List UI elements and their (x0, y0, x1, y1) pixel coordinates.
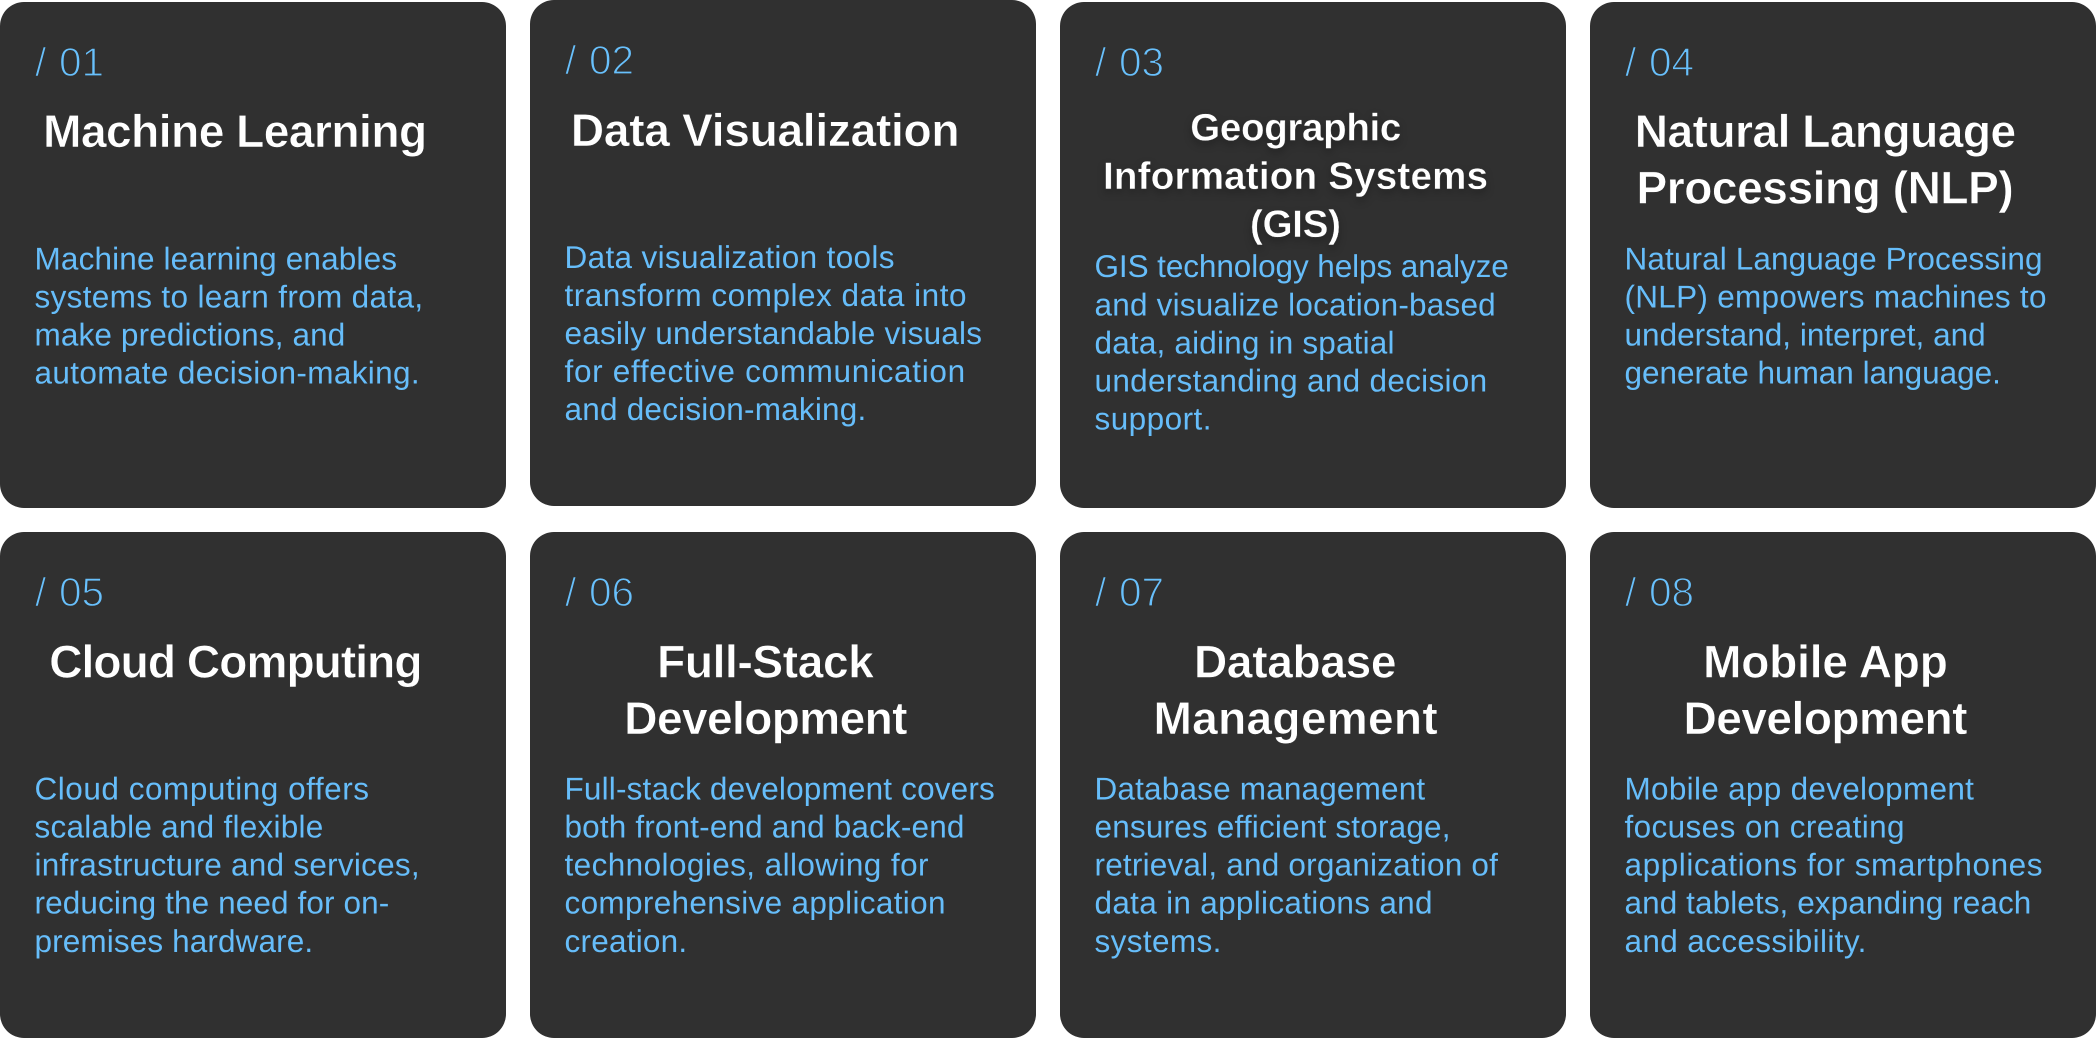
heading: Machine Learning: Machine Learning (43, 105, 427, 157)
text block: GIS description: GIS technology helps analyze (1094, 248, 1509, 284)
text block: Machine Learning description (34, 240, 423, 391)
number 03: / (1095, 39, 1106, 85)
text block: Database description: retrieval, and organization of (1094, 847, 1498, 883)
heading: Full-Stack Development: Full-Stack (657, 636, 874, 688)
panel: 01 Machine Learning (0, 2, 506, 508)
text block: Mobile App description: and tablets, expanding reach (1624, 885, 2031, 921)
text block: Cloud Computing description (34, 770, 420, 959)
text block: NLP description: generate human language. (1624, 355, 2001, 391)
heading: Mobile App Development (1684, 636, 1968, 744)
heading: Database Management: Database (1194, 636, 1396, 688)
heading: Database Management (1154, 636, 1438, 744)
text block: Data Visualization description: Data visualization tools (564, 239, 894, 275)
number 02: 02 (589, 37, 634, 83)
heading: Mobile App Development: Mobile App (1703, 636, 1948, 688)
panel: 02 Data Visualization (530, 0, 1036, 506)
number 01: 01 (59, 39, 104, 85)
heading: Full-Stack Development: Development (624, 692, 908, 744)
text block: GIS description: data, aiding in spatial (1094, 324, 1394, 360)
text block: Mobile App description: focuses on creating (1624, 808, 1904, 844)
text block: GIS description: and visualize location-based (1094, 286, 1496, 322)
number 03: 03 (1119, 39, 1164, 85)
text block: Full-Stack description: technologies, allowing for (564, 847, 928, 883)
text block: Full-Stack description: comprehensive application (564, 885, 946, 921)
panel: 06 Full-Stack Development (530, 532, 1036, 1038)
number 01: / (35, 39, 46, 85)
panel: 08 Mobile App Development (1590, 532, 2096, 1038)
text block: NLP description (1624, 240, 2046, 391)
text block: Mobile App description: Mobile app development (1624, 770, 1974, 806)
heading: Data Visualization: Data Visualization (571, 104, 960, 156)
number 04: / (1625, 39, 1636, 85)
heading: Geographic Information Systems (GIS): Information Systems (1103, 155, 1488, 198)
text block: NLP description: (NLP) empowers machines to (1624, 278, 2046, 314)
heading: Geographic Information Systems (GIS) (1103, 106, 1488, 246)
text block: Database description: Database management (1094, 770, 1425, 806)
heading: Mobile App Development: Development (1684, 692, 1968, 744)
text block: Mobile App description: applications for smartphones (1624, 847, 2042, 883)
heading: Database Management: Management (1154, 692, 1438, 744)
text block: Cloud Computing description: reducing the need for on- (34, 885, 389, 921)
text block: Cloud Computing description: Cloud computing offers (34, 770, 369, 806)
text block: Data Visualization description: easily understandable visuals (564, 315, 982, 351)
heading: Natural Language Processing (NLP): Natural Language (1635, 105, 2016, 157)
text block: Cloud Computing description: infrastructure and services, (34, 847, 420, 883)
heading: Natural Language Processing (NLP): Processing (NLP) (1636, 162, 2014, 214)
panel: 04 Natural Language Processing (1590, 2, 2096, 508)
text block: Data Visualization description: for effective communication (564, 353, 965, 389)
text block: Full-Stack description (564, 770, 995, 959)
number 02: / (565, 37, 576, 83)
text block: NLP description: Natural Language Processing (1624, 240, 2042, 276)
panel: 03 Geographic Information Systems (1060, 2, 1566, 508)
text block: Data Visualization description: and decision-making. (564, 391, 866, 427)
text block: GIS description (1094, 248, 1509, 437)
text block: Cloud Computing description: scalable and flexible (34, 808, 323, 844)
text block: Machine Learning description: make predictions, and (34, 317, 345, 353)
text block: GIS description: understanding and decision (1094, 362, 1487, 398)
number 06: 06 (589, 569, 634, 615)
number 08: / (1625, 569, 1636, 615)
text block: Database description (1094, 770, 1498, 959)
number 04: 04 (1649, 39, 1694, 85)
text block: Database description: systems. (1094, 923, 1221, 959)
text block: Data Visualization description: transform complex data into (564, 277, 966, 313)
heading: Full-Stack Development (624, 636, 908, 744)
text block: Mobile App description: and accessibility. (1624, 923, 1866, 959)
panel: 07 Database Management (1060, 532, 1566, 1038)
text block: Data Visualization description (564, 239, 982, 427)
number 08: 08 (1649, 569, 1694, 615)
heading: Cloud Computing: Cloud Computing (49, 636, 422, 688)
text block: GIS description: support. (1094, 401, 1212, 437)
number 06: / (565, 569, 576, 615)
text block: Machine Learning description: automate decision-making. (34, 355, 420, 391)
text block: Database description: ensures efficient storage, (1094, 808, 1450, 844)
number 05: / (35, 569, 46, 615)
heading: Geographic Information Systems (GIS): Geographic (1190, 106, 1401, 150)
text block: Full-Stack description: both front-end and back-end (564, 808, 964, 844)
text block: Machine Learning description: systems to learn from data, (34, 278, 423, 314)
text block: NLP description: understand, interpret, and (1624, 317, 1986, 353)
heading: Geographic Information Systems (GIS): (GIS) (1250, 203, 1341, 246)
text block: Database description: data in applications and (1094, 885, 1432, 921)
heading: Natural Language Processing (NLP) (1635, 105, 2016, 214)
text block: Full-Stack description: creation. (564, 923, 687, 959)
text block: Mobile App description (1624, 770, 2042, 959)
panel: 05 Cloud Computing (0, 532, 506, 1038)
number 07: 07 (1119, 569, 1164, 615)
text block: Cloud Computing description: premises hardware. (34, 923, 313, 959)
text block: Machine Learning description: Machine learning enables (34, 240, 397, 276)
number 07: / (1095, 569, 1106, 615)
number 05: 05 (59, 569, 104, 615)
text block: Full-Stack description: Full-stack development covers (564, 770, 995, 806)
